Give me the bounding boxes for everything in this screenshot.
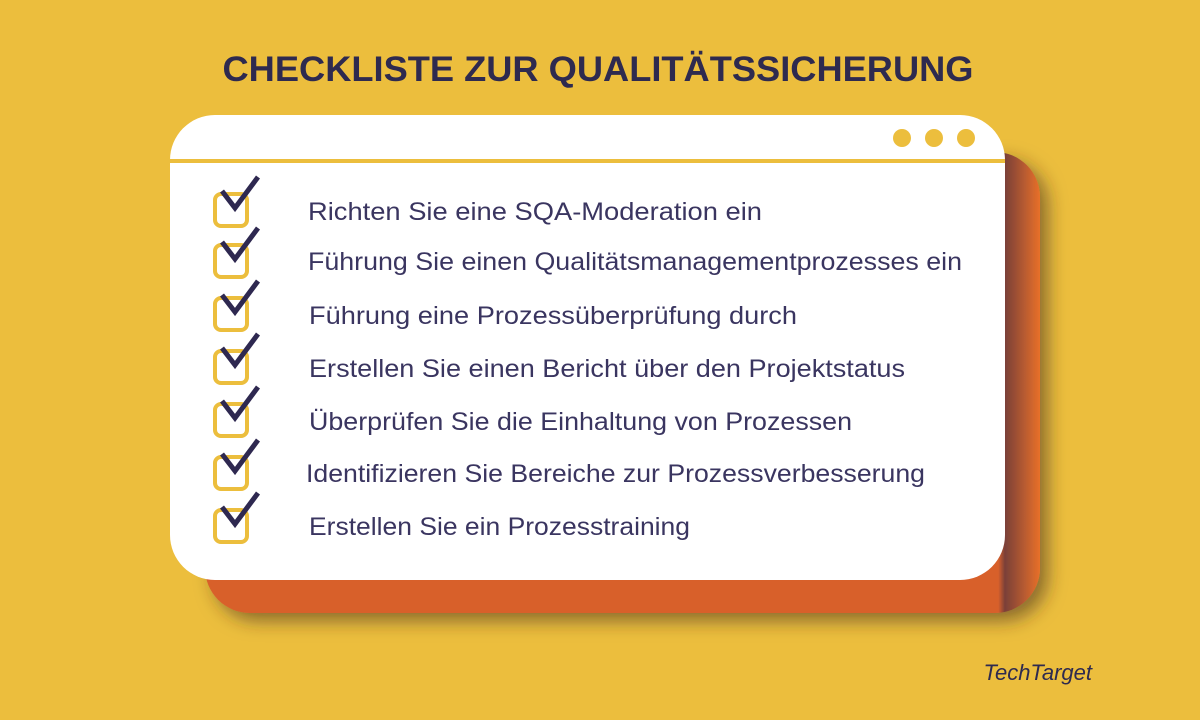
item 1: Richten Sie eine SQA-Moderation ein bbox=[308, 198, 762, 226]
logo: TechTarget: TechTarget bbox=[984, 660, 1093, 685]
panel: checklist window bbox=[170, 115, 1005, 580]
item 2: Führung Sie einen Qualitätsmanagementprozesses ein bbox=[308, 248, 962, 276]
item 1 bbox=[215, 177, 762, 226]
icon: window dots bbox=[893, 129, 975, 147]
back card: orange shadow panel bbox=[205, 152, 1040, 613]
item 7: Erstellen Sie ein Prozesstraining bbox=[309, 513, 690, 541]
checklist items bbox=[215, 177, 962, 542]
item 5 bbox=[215, 387, 852, 436]
item 3: Führung eine Prozessüberprüfung durch bbox=[309, 302, 797, 330]
item 2 bbox=[215, 228, 962, 277]
item 5: Überprüfen Sie die Einhaltung von Prozessen bbox=[309, 408, 852, 436]
item 7 bbox=[215, 493, 690, 542]
item 6: Identifizieren Sie Bereiche zur Prozessverbesserung bbox=[306, 460, 925, 488]
item 4 bbox=[215, 334, 905, 383]
item 6 bbox=[215, 440, 925, 489]
item 3 bbox=[215, 281, 797, 330]
item 4: Erstellen Sie einen Bericht über den Projektstatus bbox=[309, 355, 905, 383]
title: CHECKLISTE ZUR QUALITÄTSSICHERUNG bbox=[222, 50, 974, 89]
